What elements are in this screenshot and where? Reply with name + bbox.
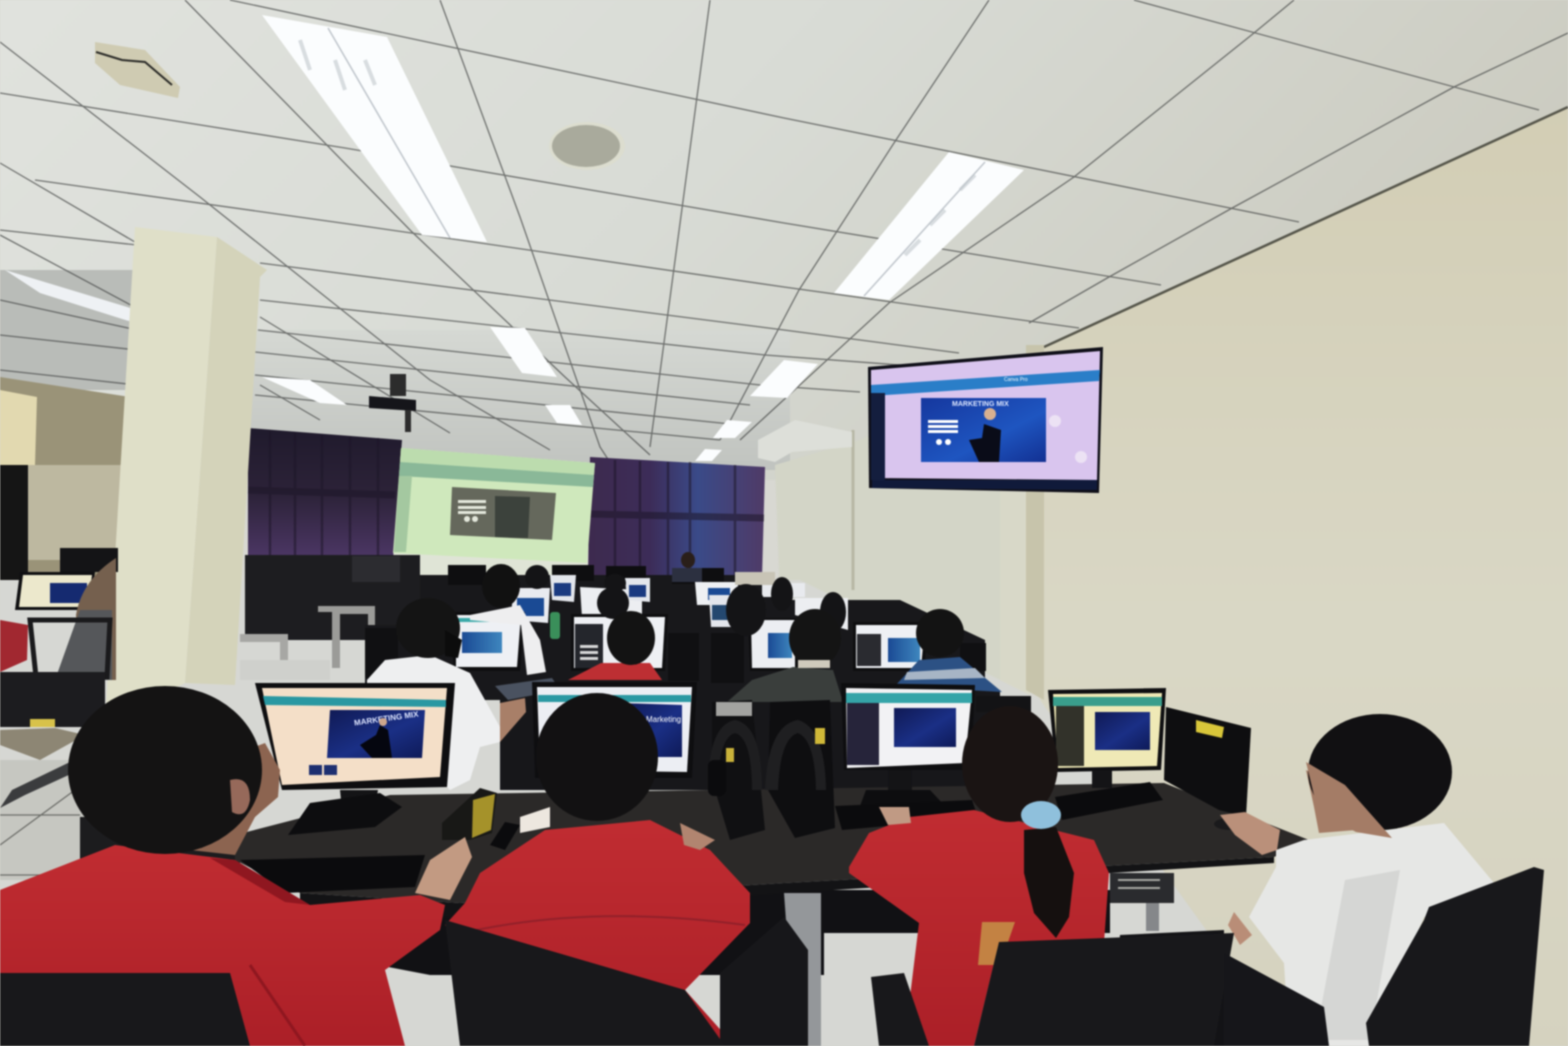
left far wall bbox=[28, 465, 130, 560]
back monitors bbox=[448, 565, 848, 630]
ceiling speaker bbox=[549, 122, 625, 170]
air conditioner bbox=[758, 420, 852, 462]
chair: student 3 bbox=[871, 933, 1234, 1046]
mid rows dark backdrop bbox=[365, 575, 985, 700]
left background wall bbox=[0, 377, 130, 600]
PC towers at back bbox=[365, 628, 986, 683]
ceiling bbox=[0, 0, 1568, 480]
desk drawer bbox=[1110, 873, 1174, 903]
ceiling light: large left bbox=[262, 15, 487, 242]
mid student: white shirt with mask bbox=[367, 598, 526, 790]
curtain right bbox=[588, 457, 765, 578]
mid monitor 1 bbox=[453, 612, 525, 671]
PC tower left with headphones bbox=[708, 700, 765, 840]
chair: student 4 bbox=[1224, 867, 1544, 1046]
front desk edge bbox=[300, 857, 1274, 917]
dark band behind front monitors bbox=[500, 690, 1000, 790]
student 4: white shirt bbox=[1220, 714, 1494, 1046]
wall pipe bbox=[852, 430, 854, 590]
student 1: red jacket bbox=[0, 686, 472, 1046]
keyboards bbox=[240, 782, 1163, 893]
right wall bbox=[1040, 107, 1568, 1046]
floor patch bbox=[240, 660, 330, 680]
projection screen bbox=[393, 448, 595, 563]
front monitor 1: MARKETING MIX bbox=[354, 710, 420, 728]
mouse bbox=[1214, 818, 1246, 830]
student 3 trousers and seat bbox=[1110, 930, 1224, 1046]
floor bbox=[0, 580, 1290, 1046]
wall ceiling edge bbox=[1044, 107, 1568, 347]
wall TV bbox=[868, 347, 1103, 493]
dark back of monitor right bbox=[976, 696, 1031, 712]
PC tower far right bbox=[1164, 707, 1251, 817]
wall TV: Canva Pro bbox=[1004, 377, 1028, 383]
dark desk end panel bbox=[80, 817, 240, 870]
far left monitor bbox=[15, 572, 95, 610]
under desk shadow bbox=[300, 890, 1110, 975]
chair: student 2 bbox=[445, 920, 725, 1046]
ceiling light: far left bbox=[5, 270, 137, 323]
chair: student 1 bbox=[0, 973, 250, 1046]
right desk leg bbox=[1146, 903, 1159, 931]
presenter on TV bbox=[969, 424, 1001, 462]
front monitor 2: Marketing bbox=[646, 715, 681, 724]
mid student: red shirt bbox=[568, 611, 662, 680]
mid monitor 4 bbox=[853, 622, 928, 671]
pencil case bbox=[442, 788, 497, 840]
left window bbox=[0, 390, 37, 465]
projector bbox=[369, 374, 416, 432]
back right wall bbox=[775, 360, 1030, 700]
teacher bbox=[672, 552, 702, 582]
far left desk bbox=[240, 634, 288, 680]
far left lab area bbox=[60, 548, 420, 680]
left floor tiles bbox=[0, 760, 130, 880]
mid student: blue jacket bbox=[895, 609, 1002, 692]
wall TV: MARKETING MIX bbox=[952, 401, 1009, 408]
curtain left bbox=[248, 428, 402, 560]
front monitor 3 bbox=[841, 683, 975, 806]
back students bbox=[525, 565, 846, 636]
left doorway bbox=[0, 465, 28, 580]
tablet on desk bbox=[495, 678, 560, 700]
smoke detector bbox=[95, 42, 180, 98]
front monitor 2 bbox=[532, 682, 697, 778]
mid student: gray sweater bbox=[727, 609, 843, 702]
mid student: back white shirt bbox=[470, 564, 546, 675]
ceiling lights: middle bbox=[262, 327, 818, 461]
projection wall bbox=[390, 448, 595, 580]
mid monitor 3 bbox=[748, 618, 798, 671]
face bbox=[190, 743, 280, 855]
front monitor 4 bbox=[1048, 688, 1166, 788]
green bottle bbox=[550, 612, 560, 639]
front desk bbox=[235, 783, 1309, 903]
far left student and chair bbox=[0, 558, 116, 808]
wall corner pillar bbox=[1000, 490, 1030, 700]
mid monitor 2 bbox=[571, 614, 668, 671]
front monitor 1 bbox=[255, 683, 455, 835]
pillar bbox=[105, 227, 267, 723]
student 3: red jacket with ponytail bbox=[849, 706, 1109, 1046]
student 2: red jacket bbox=[445, 693, 808, 1046]
far left second desk bbox=[318, 606, 375, 668]
gray desk leg panel bbox=[784, 893, 821, 1046]
hand bbox=[415, 837, 472, 900]
PC tower right with headphones bbox=[765, 700, 835, 838]
ceiling light: large right bbox=[834, 152, 1024, 300]
